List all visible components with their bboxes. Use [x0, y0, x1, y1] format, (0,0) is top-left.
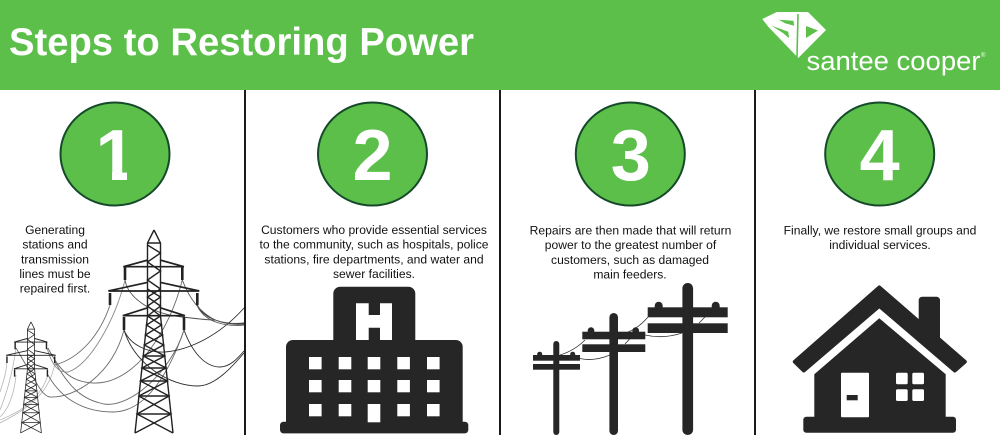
- panel: step 3 main feeders: [530, 102, 731, 435]
- step 4 text: Finally, we restore small groups and: [784, 224, 976, 238]
- step 2 text: [260, 223, 489, 281]
- number badge 2: 2: [352, 116, 393, 196]
- logo: santee cooper: [762, 12, 986, 76]
- icon: transmission towers and power lines: [0, 230, 244, 433]
- step 3 text: Repairs are then made that will return: [530, 224, 731, 238]
- step 2 text: Customers who provide essential services: [261, 223, 487, 237]
- wires to right edge: [124, 280, 244, 386]
- step 3 text: customers, such as damaged: [551, 253, 709, 267]
- step 4 text: individual services.: [829, 238, 931, 252]
- title: Steps to Restoring Power: [9, 21, 474, 64]
- step 1 text: transmission: [21, 252, 89, 266]
- step 2 text: sewer facilities.: [333, 267, 415, 281]
- step 3 text: [530, 224, 731, 282]
- icon: hospital: [280, 287, 468, 433]
- step 3 text: power to the greatest number of: [545, 238, 717, 252]
- number badge 4: 4: [860, 116, 900, 196]
- number badge 3: [576, 102, 685, 206]
- number badge 2: [318, 102, 427, 206]
- step 4 text: [784, 224, 976, 252]
- step 1 text: stations and: [22, 238, 88, 252]
- step 1 text: lines must be: [19, 267, 91, 281]
- number badge 4: [825, 102, 934, 206]
- registered mark: ®: [981, 52, 986, 59]
- small pole: [533, 341, 580, 435]
- middle pole: [582, 313, 645, 435]
- wires: [560, 312, 710, 360]
- logo wordmark: santee cooper: [806, 46, 981, 76]
- icon: utility poles: [533, 283, 728, 435]
- icon: house: [795, 288, 965, 433]
- step 1 text: repaired first.: [20, 282, 90, 296]
- panel: step 1 generating stations: [0, 102, 244, 433]
- step 2 text: stations, fire departments, and water and: [264, 252, 484, 266]
- large tower: [108, 230, 199, 433]
- step 1 text: Generating: [25, 223, 85, 237]
- panel: step 2 essential services: [260, 102, 489, 433]
- step 1 text: [19, 223, 91, 296]
- step 2 text: to the community, such as hospitals, police: [260, 238, 489, 252]
- number badge 1: [60, 102, 170, 206]
- large pole: [648, 283, 728, 435]
- wires between towers: [16, 280, 184, 412]
- icon: SC diamond: [762, 12, 826, 58]
- light wires left of small tower: [0, 348, 55, 423]
- panel: step 4 individual services: [784, 102, 976, 433]
- step 3 text: main feeders.: [593, 268, 667, 282]
- number badge 1: 1: [95, 116, 136, 196]
- header banner: [0, 0, 1000, 90]
- small tower: [6, 322, 56, 433]
- number badge 3: 3: [611, 116, 651, 196]
